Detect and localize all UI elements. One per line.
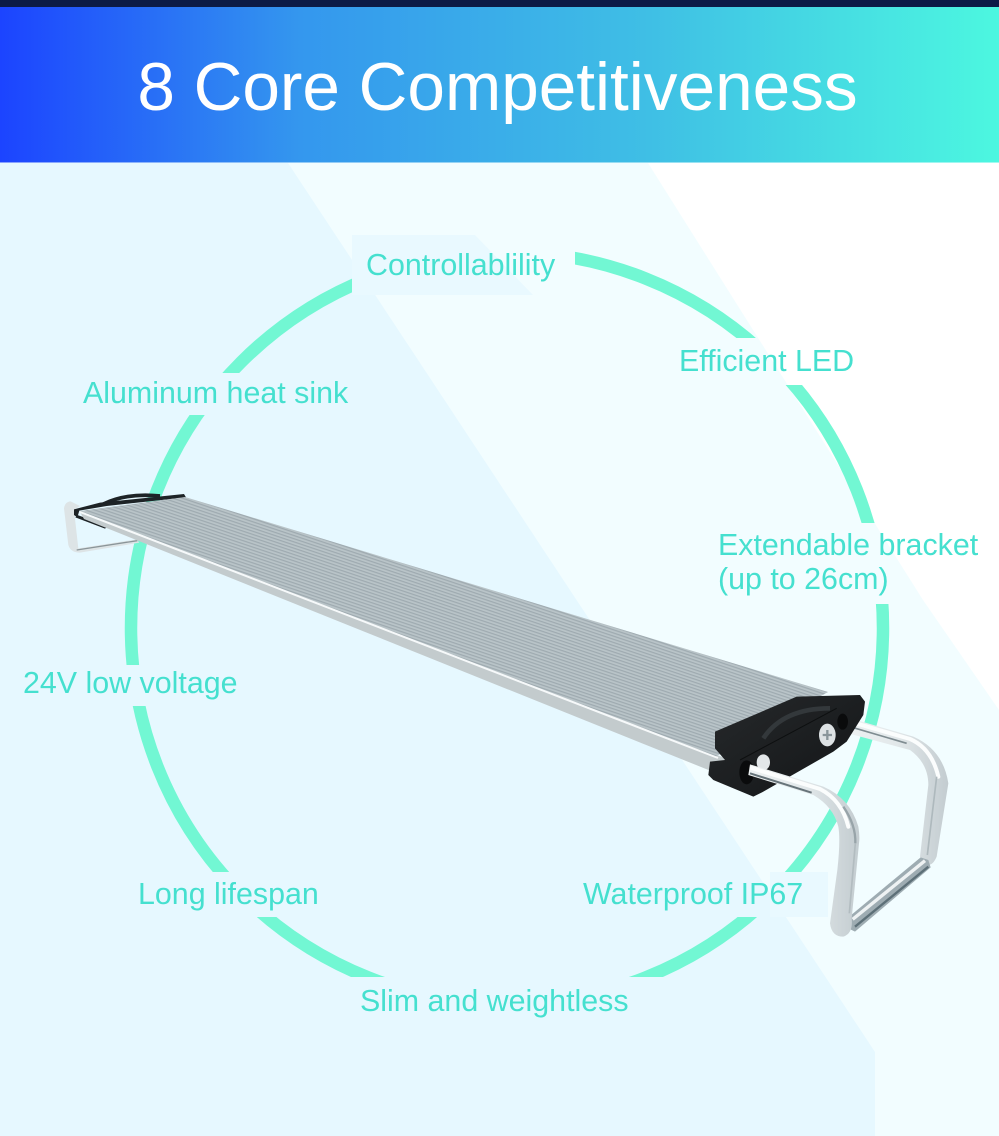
screw: [819, 724, 836, 746]
lamp side edge: [80, 512, 725, 775]
cross tube and front bracket tube: [748, 764, 931, 937]
screw: [757, 754, 770, 770]
label: Aluminum heat sink: Aluminum heat sink: [83, 376, 349, 410]
label: Controllablility: Controllablility: [366, 248, 556, 282]
plate bright edge: [80, 512, 718, 758]
label: Efficient LED: Efficient LED: [679, 344, 854, 378]
left bracket: [64, 501, 139, 553]
left black handle: [74, 494, 186, 529]
circular ring: [131, 252, 883, 1004]
header banner: [0, 0, 999, 162]
end cap: [708, 695, 865, 797]
label: Long lifespan: Long lifespan: [138, 877, 319, 911]
title: 8 Core Competitiveness: [137, 50, 858, 125]
lamp top plate: [80, 497, 828, 757]
label: Extendable bracket: Extendable bracket: [718, 528, 978, 562]
label: Slim and weightless: Slim and weightless: [360, 984, 629, 1018]
tube socket: [837, 714, 848, 730]
tube socket: [739, 760, 754, 784]
label: 24V low voltage: 24V low voltage: [23, 666, 238, 700]
product: LED light bar: [64, 494, 948, 937]
label: Waterproof IP67: Waterproof IP67: [583, 877, 803, 911]
label: Extendable bracket: (up to 26cm): [718, 562, 889, 596]
rear bracket tube: [845, 717, 948, 865]
